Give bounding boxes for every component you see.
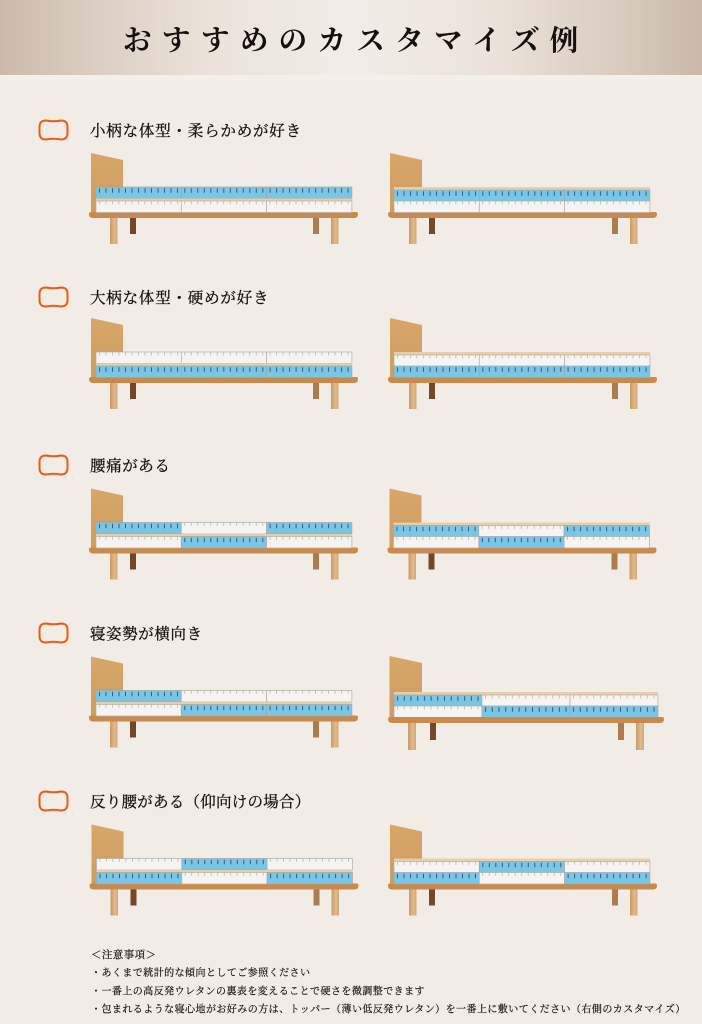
icon: orange frame [40,120,68,140]
icon: orange frame [40,456,68,474]
bed: left [89,318,358,409]
bed: left [89,153,358,244]
icon: orange frame [40,792,68,810]
icon: orange frame [40,624,68,642]
heading: 反り腰がある（仰向けの場合） [90,793,311,811]
bed: right [388,318,657,409]
section: 腰痛がある [40,456,656,580]
bed: left [90,824,358,916]
heading: 大柄な体型・硬めが好き [90,289,269,307]
bed: left [89,656,358,748]
bed: right [388,153,657,244]
heading: 腰痛がある [90,456,171,475]
bed: left [89,488,358,580]
notes text block: ・包まれるような寝心地がお好みの方は、トッパー（薄い低反発ウレタン）を一番上に敷いてください（右側のカスタマイズ） [91,1002,686,1016]
bed: right [388,824,657,916]
bed: right [388,488,656,580]
title: おすすめのカスタマイズ例 [123,25,589,57]
notes text block: ・一番上の高反発ウレタンの裏表を変えることで硬さを微調整できます [91,984,425,998]
section: 小柄な体型・柔らかめが好き [40,120,657,244]
header band [0,0,702,80]
section: 寝姿勢が横向き [40,624,664,750]
heading: 寝姿勢が横向き [90,624,203,643]
section: 反り腰がある(仰向けの場合) [40,792,657,916]
notes text block: ・あくまで統計的な傾向としてご参照ください [91,966,310,979]
notes text block [91,948,686,1016]
section: 大柄な体型・硬めが好き [40,288,657,409]
notes text block: ＜注意事項＞ [91,948,156,961]
bed: right (wider) [388,656,664,750]
heading: 小柄な体型・柔らかめが好き [90,122,302,140]
icon: orange frame [40,288,68,306]
